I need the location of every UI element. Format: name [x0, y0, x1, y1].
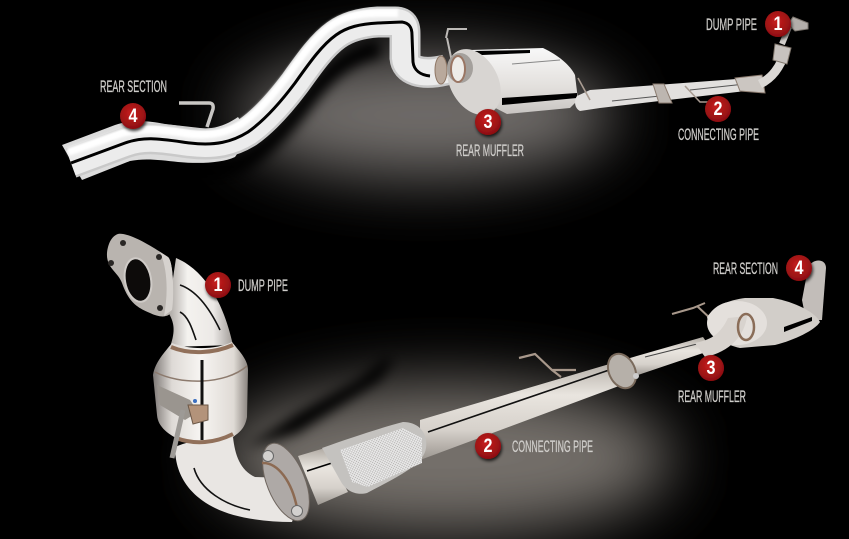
label: rear section (bottom): REAR SECTION	[713, 259, 778, 278]
label: rear section (bottom)	[713, 255, 812, 281]
bottom exhaust system	[107, 234, 826, 527]
label: connecting pipe (top): 2	[714, 99, 722, 120]
label: rear section (top)	[100, 77, 167, 129]
label: connecting pipe (bottom): CONNECTING PIPE	[512, 437, 593, 456]
top muffler	[435, 29, 578, 124]
label: dump pipe (bottom): DUMP PIPE	[238, 276, 288, 295]
label: rear section (top): 4	[128, 106, 138, 127]
label: rear muffler (bottom)	[678, 355, 746, 406]
label: connecting pipe (top)	[678, 96, 759, 144]
label: rear muffler (top): 3	[484, 112, 492, 133]
label: connecting pipe (bottom): 2	[484, 436, 492, 457]
label: dump pipe (top): 1	[774, 14, 783, 35]
label: dump pipe (bottom): 1	[214, 275, 223, 296]
label: dump pipe (top): DUMP PIPE	[706, 15, 757, 34]
label: rear muffler (top): REAR MUFFLER	[456, 141, 524, 160]
bottom muffler	[672, 260, 826, 357]
bottom flexible joint	[298, 422, 426, 505]
bottom cast shadow	[247, 357, 393, 447]
label: connecting pipe (top): CONNECTING PIPE	[678, 125, 759, 144]
label: connecting pipe (bottom)	[475, 433, 593, 459]
label: rear muffler (bottom): 3	[706, 358, 716, 379]
label: dump pipe (top)	[706, 11, 791, 37]
label: rear muffler (bottom): REAR MUFFLER	[678, 387, 746, 406]
top exhaust system	[62, 13, 808, 180]
bottom connecting pipe	[420, 337, 712, 460]
top rear section pipe	[62, 13, 446, 180]
label: rear muffler (top)	[456, 109, 524, 160]
label: dump pipe (bottom)	[205, 272, 288, 298]
top connecting pipe	[575, 75, 765, 111]
bottom dump pipe and catalytic converter	[107, 234, 319, 527]
label: rear section (bottom): 4	[794, 258, 804, 279]
label: rear section (top): REAR SECTION	[100, 77, 167, 96]
top dump pipe	[760, 17, 808, 84]
